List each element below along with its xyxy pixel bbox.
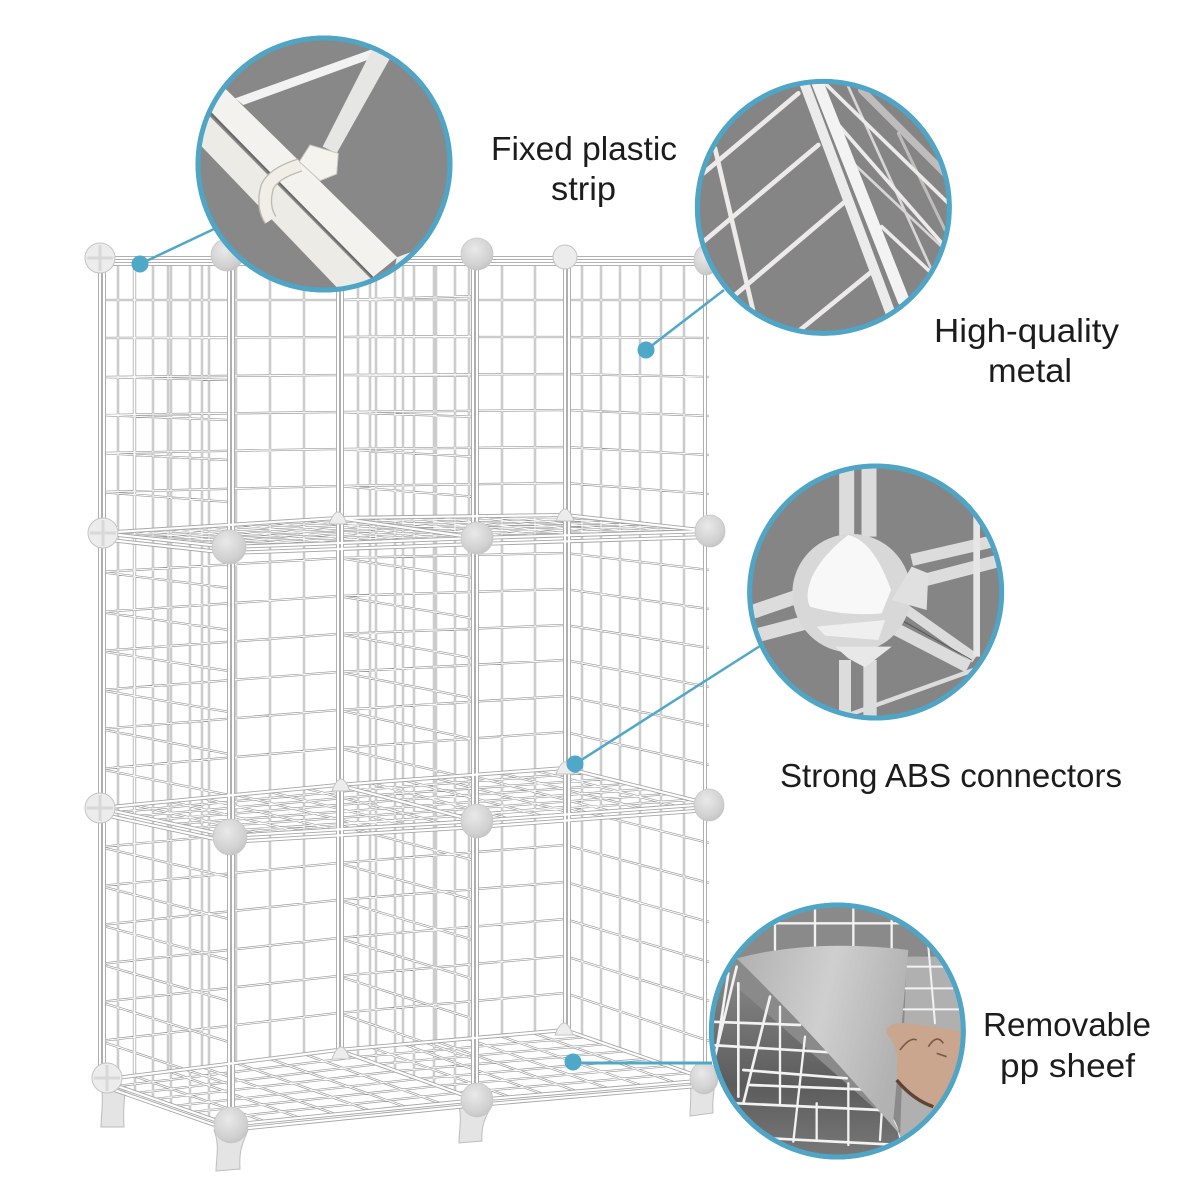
label: fixed plastic strip: Fixed plastic [491,130,677,167]
label: removable pp sheef: Removable [983,1006,1151,1043]
magnifier: ABS connector detail [745,460,1008,723]
label: removable pp sheef: pp sheef [1000,1047,1136,1084]
posts and rails [100,255,709,1130]
plastic feet [101,1076,716,1171]
front connector balls [211,238,725,1143]
label: high-quality metal [934,312,1120,389]
shelving unit [85,238,725,1171]
magnifier: removable sheet detail [707,900,970,1167]
wire mesh panels [100,262,709,1121]
callout: connector leader [566,646,760,772]
callout: sheet leader [564,1054,712,1070]
label: high-quality metal: metal [988,352,1072,389]
magnifier: metal mesh detail [692,77,955,340]
callout: plastic strip leader [132,229,214,272]
label: fixed plastic strip [491,130,677,207]
label: high-quality metal: High-quality [934,312,1120,349]
label: removable pp sheef [983,1006,1151,1084]
callout: metal leader [638,290,724,358]
label: fixed plastic strip: strip [551,170,616,207]
label: strong ABS connectors: Strong ABS connectors [780,757,1122,794]
rear connectors [85,243,577,1093]
magnifier: plastic strip detail [190,30,460,300]
